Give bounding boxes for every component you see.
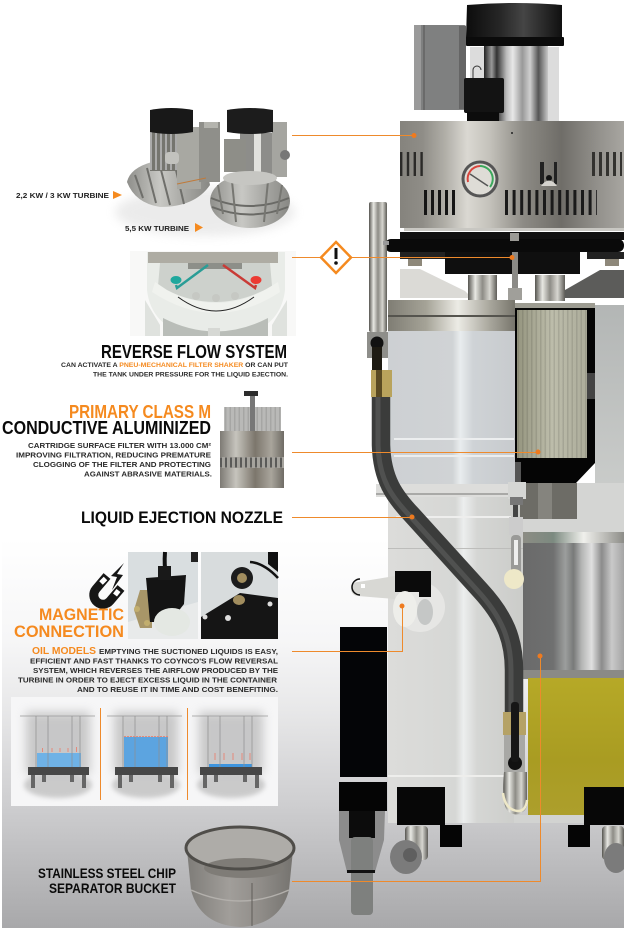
heading: conductive aluminized: CONDUCTIVE ALUMINIZED (2, 418, 211, 438)
leader line: chip separator bucket (292, 654, 542, 882)
photo: magnetic connector side view (128, 552, 198, 639)
text: cartridge description (16, 443, 212, 478)
photo: magnetic connector top view (201, 552, 278, 639)
right 5.5 kW turbine (210, 108, 290, 228)
label: 2,2 kW / 3 kW turbine: 2,2 KW / 3 KW TURBINE (16, 191, 109, 200)
side bracket and quick connection (351, 571, 445, 632)
divider (100, 708, 101, 800)
heading: stainless steel chip separator bucket (38, 865, 176, 896)
yellow oil liquid (514, 678, 624, 823)
pressure gauge (462, 160, 498, 198)
label: 5,5 kW turbine: 5,5 KW TURBINE (125, 224, 189, 233)
text: oil models description: EFFICIENT AND FAST THANKS TO COYNCO'S FLOW REVERSAL (30, 658, 279, 666)
text: reverse flow description: THE TANK UNDER PRESSURE FOR THE LIQUID EJECTION. (93, 372, 288, 378)
leader line: liquid ejection nozzle (292, 514, 414, 520)
turbine shadow (115, 188, 295, 236)
heading: magnetic connection: MAGNETIC (39, 605, 124, 624)
text: oil models description: AND TO REUSE IT IN TIME AND COST BENEFITING. (77, 687, 278, 694)
steel drum housing (400, 121, 624, 228)
cartridge filter photo (220, 391, 284, 488)
heading: stainless steel chip separator bucket: SEPARATOR BUCKET (49, 880, 176, 896)
hose with upper and lower valves (367, 202, 527, 814)
left 2.2/3 kW turbine (127, 108, 220, 207)
label: 5,5 kW turbine (125, 223, 203, 233)
red connection (223, 265, 262, 288)
stage 3: emptied (192, 712, 268, 798)
text: reverse flow description (61, 362, 288, 378)
text: oil models description: EMPTYING THE SUCTIONED LIQUIDS IS EASY, (99, 649, 278, 656)
reverse flow diagram photo (145, 252, 287, 336)
casters and feet (339, 627, 624, 915)
stage 2: full (107, 712, 182, 798)
motor assembly (414, 3, 564, 121)
pleated primary cartridge filter (515, 303, 595, 519)
text: reverse flow description: CAN ACTIVATE A PNEU-MECHANICAL FILTER SHAKER OR CAN PUT (61, 362, 288, 369)
warning diamond with leader line (292, 242, 514, 273)
container tank (376, 300, 523, 823)
heading: magnetic connection: CONNECTION (14, 622, 124, 641)
text: cartridge description: CARTRIDGE SURFACE FILTER WITH 13.000 CM² (28, 443, 212, 450)
bucket photo (186, 827, 294, 927)
text: oil models description: SYSTEM, WHICH REVERSES THE AIRFLOW PRODUCED BY THE (33, 668, 278, 675)
text: cartridge description: AGAINST ABRASIVE MATERIALS. (84, 472, 212, 478)
heading: liquid ejection nozzle: LIQUID EJECTION NOZZLE (81, 508, 283, 527)
text: cartridge description: IMPROVING FILTRATION, REDUCING PREMATURE (16, 452, 211, 460)
leader line: cartridge filter (292, 450, 540, 454)
stainless mesh bucket in machine (523, 532, 624, 679)
text: oil models description: OIL MODELS (32, 646, 96, 657)
text: oil models description (18, 646, 279, 694)
heading: magnetic connection (14, 605, 124, 641)
cream disc (504, 569, 524, 589)
curved double arrow (178, 297, 254, 311)
leader line: magnetic connection (292, 604, 404, 652)
filter shaker and lid section (385, 228, 624, 301)
magnet icon (94, 563, 124, 604)
turbine photos (115, 108, 295, 236)
machine: industrial vacuum (339, 3, 624, 915)
heading: stainless steel chip separator bucket: STAINLESS STEEL CHIP (38, 865, 176, 881)
heading: reverse flow system: REVERSE FLOW SYSTEM (101, 342, 287, 362)
text: oil models description: TURBINE IN ORDER TO EJECT EXCESS LIQUID IN THE CONTAINER (18, 678, 277, 684)
right side interior (520, 305, 624, 533)
stage 1: partially filled (20, 712, 95, 798)
clamp latch (508, 462, 526, 575)
text: cartridge description: CLOGGING OF THE FILTER AND PROTECTING (33, 462, 212, 469)
panel: liquid ejection stages (11, 697, 278, 806)
leader line: turbine (292, 133, 416, 138)
divider (187, 708, 188, 800)
teal connection (170, 265, 208, 288)
heading: primary class M: PRIMARY CLASS M (69, 402, 211, 422)
